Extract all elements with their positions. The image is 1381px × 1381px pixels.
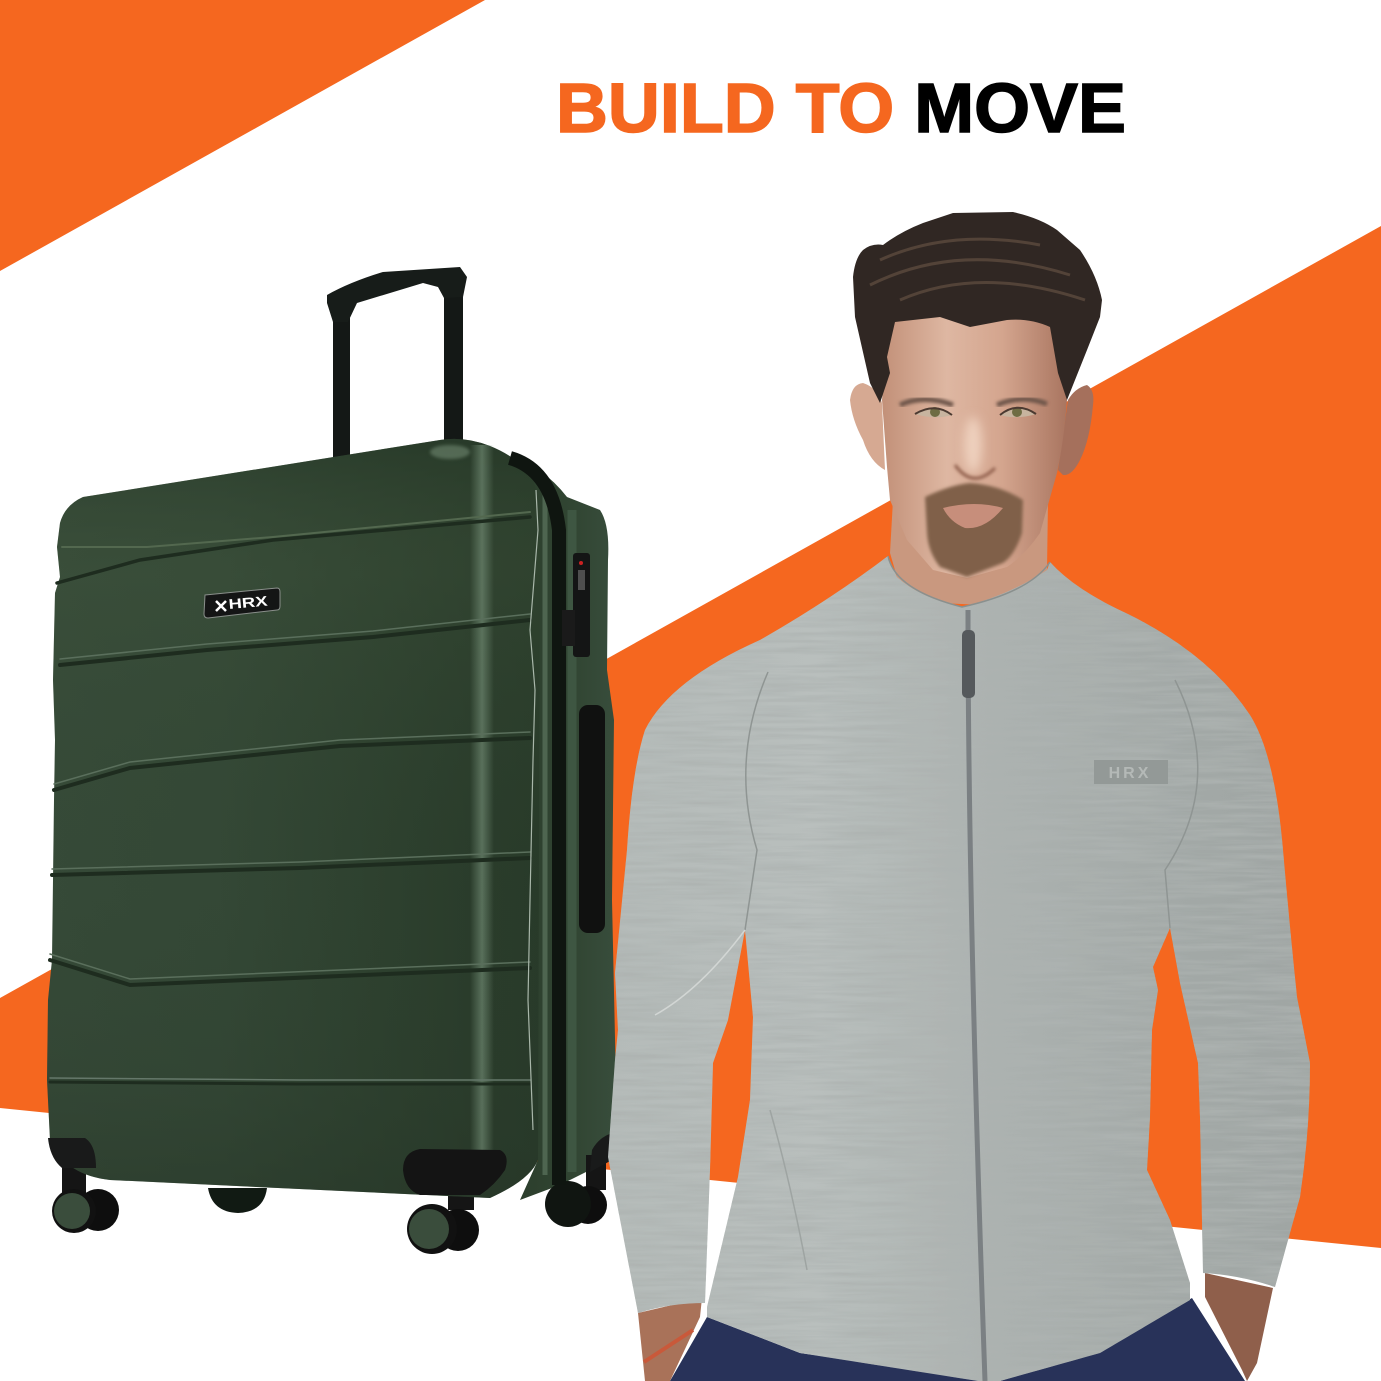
shell shading: [47, 439, 540, 1198]
nose shadow: [955, 465, 995, 478]
orange triangle top left: [0, 0, 485, 271]
hair strands: [870, 239, 1085, 300]
top corner highlight: [430, 445, 470, 459]
combination lock: [562, 553, 590, 657]
beard: [925, 483, 1023, 577]
zipper: [962, 610, 985, 1381]
right hand: [1205, 1273, 1273, 1381]
nose highlight: [964, 417, 982, 473]
rear shell side: [503, 457, 617, 1200]
wrist band: [644, 1330, 693, 1362]
title: BUILD TO MOVE: [556, 69, 1126, 147]
neck: [890, 500, 1048, 605]
brand badge: [204, 588, 280, 618]
left ear: [850, 383, 885, 470]
suitcase: [47, 267, 617, 1254]
brand badge: HRX: [228, 593, 269, 612]
seam strip: [542, 490, 548, 1175]
sleeve seams: [655, 556, 1198, 1270]
white edge line: [528, 490, 538, 1130]
chest logo: HRX: [1109, 765, 1151, 782]
person: [608, 212, 1310, 1381]
chest logo: [1094, 760, 1168, 784]
zipper: [510, 458, 559, 1185]
side carry handle: [579, 705, 605, 933]
vertical shine: [470, 445, 494, 1175]
eyes: [915, 407, 1036, 417]
corner bumpers: [48, 1138, 96, 1168]
left hand: [638, 1298, 702, 1381]
telescopic handle: [327, 267, 467, 458]
mouth: [943, 504, 1003, 528]
face: [882, 300, 1067, 578]
right ear: [1058, 385, 1093, 475]
hair: [853, 212, 1102, 403]
lighter side strip: [568, 510, 576, 1172]
orange diagonal band: [0, 226, 1381, 1248]
front shell: [47, 439, 540, 1198]
shell ridges: [50, 512, 530, 1084]
jacket: [608, 556, 1310, 1381]
eyebrows: [900, 400, 953, 405]
wheels: [52, 1155, 607, 1254]
trousers: [670, 1298, 1245, 1381]
